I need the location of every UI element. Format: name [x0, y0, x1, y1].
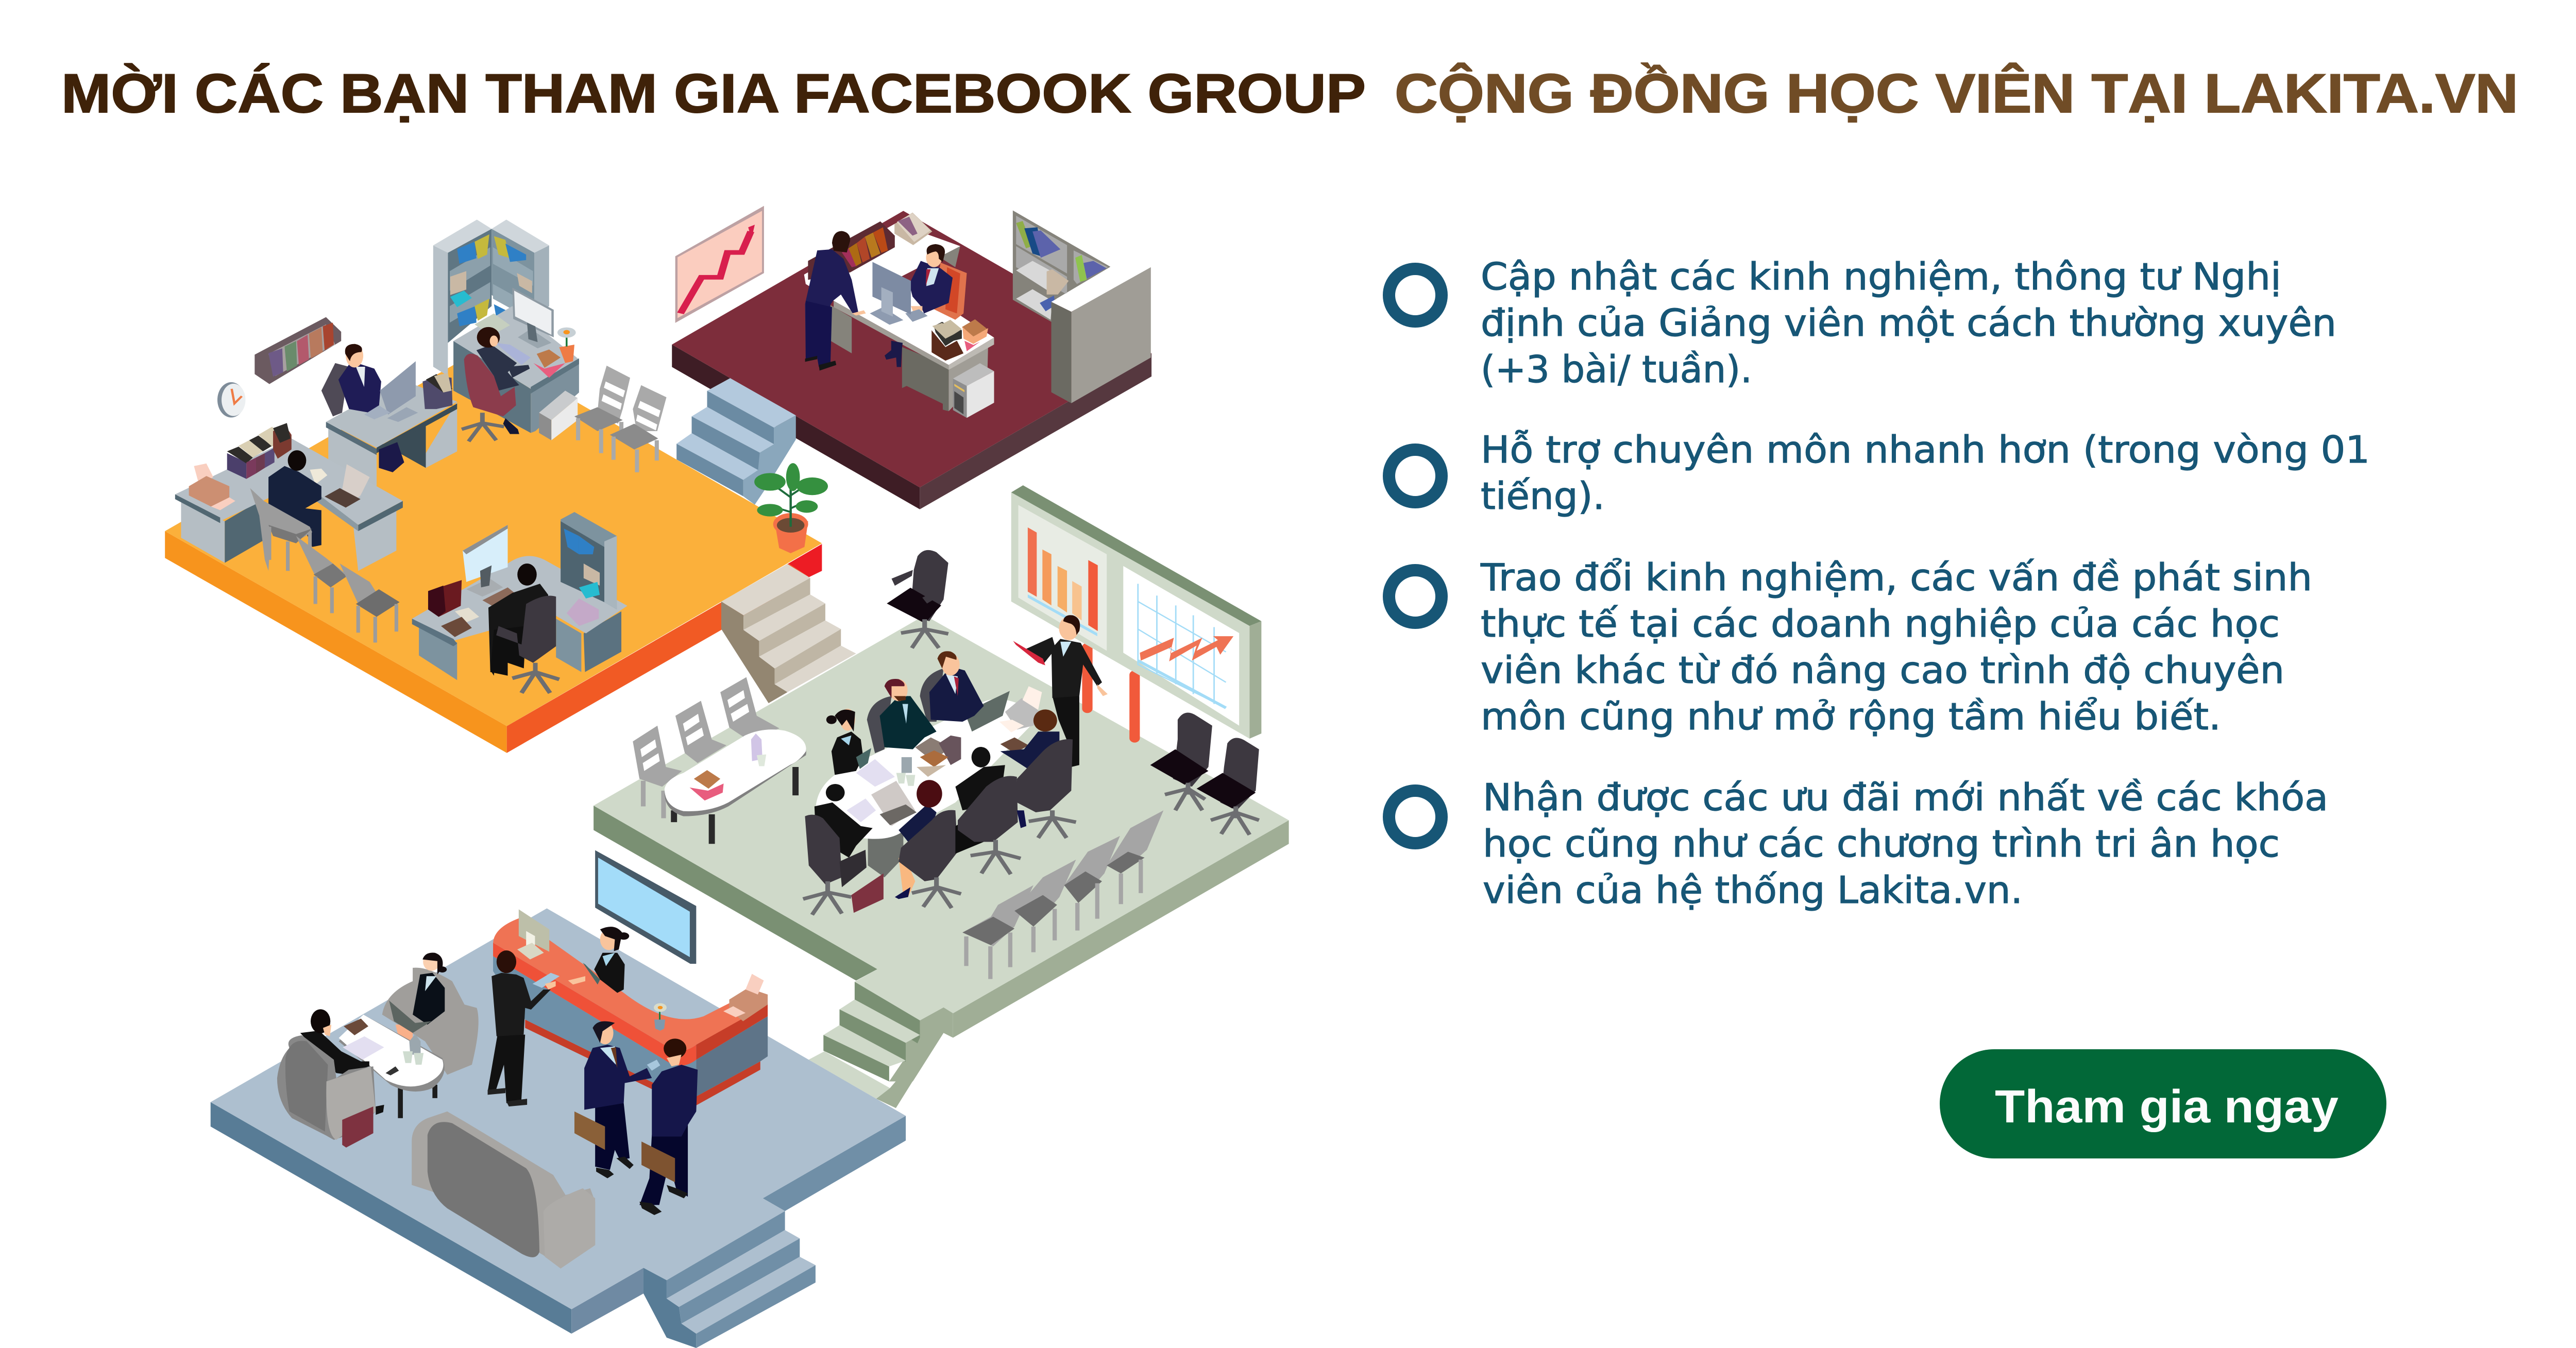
benefit 4: viên của hệ thống Lakita.vn.: [1483, 868, 2023, 912]
front desk with man: [412, 512, 628, 693]
seated bearded man: [867, 679, 937, 753]
lounge sofa: [412, 1112, 595, 1269]
blue floor: [211, 908, 906, 1334]
back desk with woman: [453, 287, 579, 441]
large meeting table: [816, 686, 1043, 877]
flower vase: [654, 1003, 667, 1031]
beige staircase: [721, 564, 856, 703]
benefit 4: [1389, 776, 2328, 912]
room: manager office on maroon floor: [672, 206, 1151, 509]
lower green steps: [809, 1033, 943, 1108]
benefit 3: thực tế tại các doanh nghiệp của các học: [1481, 602, 2280, 645]
seated man in armchair: [277, 1009, 384, 1148]
man with brown bag: [639, 1038, 698, 1215]
benefit 2: Hỗ trợ chuyên môn nhanh hơn (trong vòng 01: [1481, 428, 2370, 471]
presenter: [1013, 615, 1108, 767]
button: Tham gia ngay: Tham gia ngay: [1995, 1081, 2338, 1133]
green staircase: [823, 982, 953, 1082]
corner bookcase: [433, 219, 549, 376]
small meeting table: [665, 729, 806, 844]
benefit 2: [1389, 428, 2370, 518]
staircase: blue to maroon floor: [676, 378, 796, 505]
green floor: [594, 616, 1289, 1038]
reception counter: [493, 918, 768, 1108]
wall clock: [217, 382, 245, 418]
title: CỘNG ĐỒNG HỌC VIÊN TẠI LAKITA.VN: [1395, 62, 2518, 124]
wall chart: [675, 206, 764, 323]
benefit 1: (+3 bài/ tuần).: [1481, 348, 1752, 391]
benefit 1: Cập nhật các kinh nghiệm, thông tư Nghị: [1481, 255, 2281, 298]
wall screen: [595, 850, 696, 964]
orange room furniture: [175, 219, 828, 693]
room: open office on orange floor: [165, 348, 822, 753]
lounge table: [339, 1015, 445, 1118]
benefit 4: Nhận được các ưu đãi mới nhất về các khóa: [1483, 776, 2328, 819]
benefit 3: viên khác từ đó nâng cao trình độ chuyên: [1481, 649, 2284, 692]
left desk with man writing: [175, 423, 403, 643]
desk: [804, 223, 994, 411]
button: Tham gia ngay: [1940, 1049, 2386, 1158]
benefit 4: học cũng như các chương trình tri ân học: [1483, 822, 2280, 865]
potted plant: [754, 463, 828, 553]
seated man top: [920, 651, 984, 722]
desk phone: [894, 213, 933, 245]
monitor: [870, 262, 928, 325]
front row side chairs: [962, 810, 1163, 979]
title: MỜI CÁC BẠN THAM GIA FACEBOOK GROUP: [61, 62, 1366, 124]
computer tower: [539, 390, 578, 440]
man with briefcase: [574, 1021, 660, 1179]
seated woman with tablet: [826, 709, 871, 775]
seated manager: [885, 244, 967, 367]
front chairs and people: [803, 709, 1076, 915]
man with tablet: [488, 950, 560, 1106]
reception monitor: [517, 909, 549, 960]
benefit 1: định của Giảng viên một cách thường xuyên: [1481, 301, 2336, 345]
right executive chairs: [1150, 712, 1259, 835]
desk with man at monitor: [321, 344, 457, 486]
benefit 1: [1389, 255, 2336, 391]
room: meeting room on green floor: [594, 485, 1289, 1082]
benefits list: [1389, 255, 2370, 912]
seated woman with laptop: [382, 952, 479, 1074]
room: reception on blue floor: [211, 850, 943, 1348]
blue steps: [643, 1211, 816, 1348]
benefit 3: Trao đổi kinh nghiệm, các vấn đề phát sinh: [1480, 556, 2312, 599]
binders and books: [931, 319, 988, 361]
illustration: isometric office: [165, 206, 1289, 1348]
wall shelf of books: [808, 221, 895, 280]
bookcase and partition: [1013, 211, 1151, 403]
fax machine: [723, 974, 768, 1021]
benefit 2: tiếng).: [1481, 474, 1605, 518]
benefit 3: môn cũng như mở rộng tầm hiểu biết.: [1481, 695, 2221, 738]
lone executive chair: [887, 550, 948, 648]
presentation board: [1011, 485, 1261, 743]
receptionist: [568, 927, 629, 993]
side chairs row: [633, 677, 779, 818]
title: [61, 62, 2518, 124]
side chairs: [574, 366, 667, 472]
computer tower: [953, 363, 994, 418]
benefit 3: [1389, 556, 2312, 738]
wall book rack: [255, 317, 341, 384]
standing colleague: [805, 231, 866, 370]
